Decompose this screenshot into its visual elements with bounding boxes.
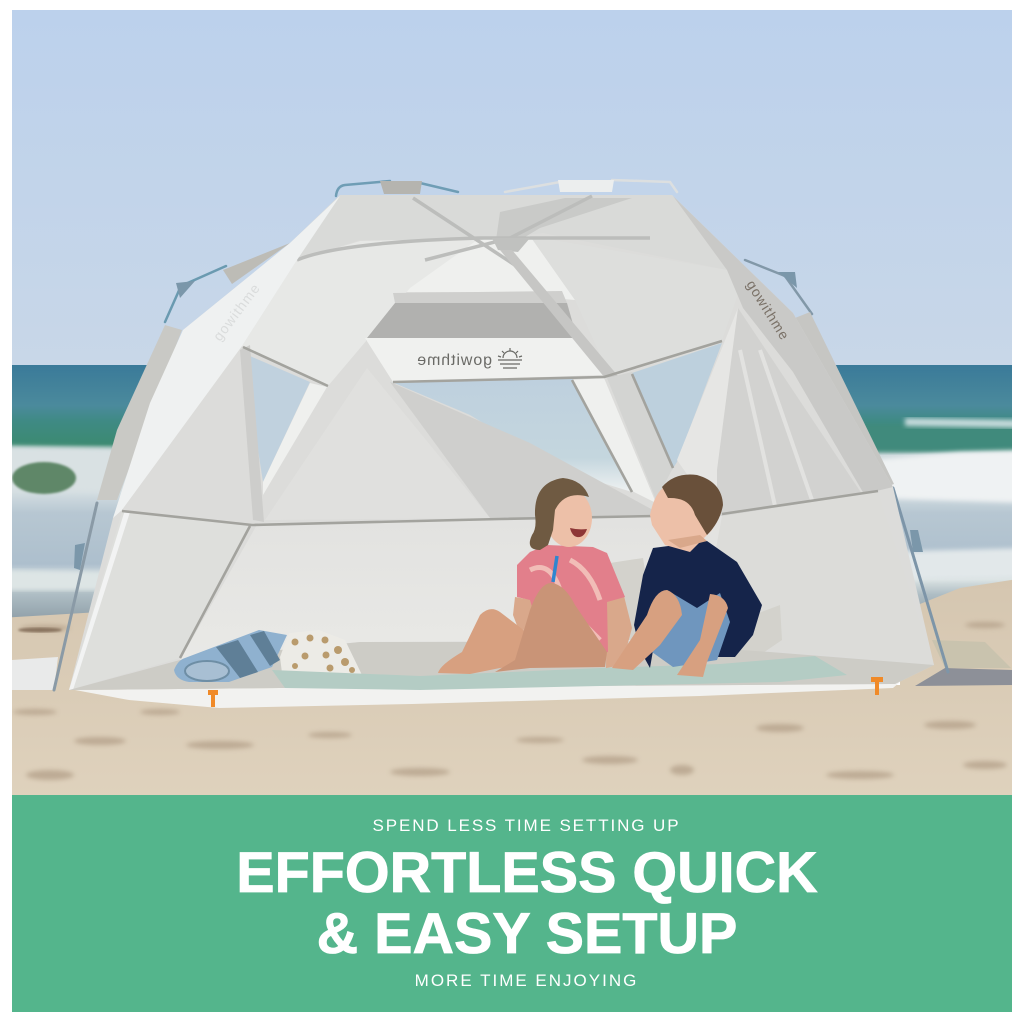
center triangle <box>265 368 490 520</box>
tent silhouette base <box>69 195 934 690</box>
left side panel <box>122 347 264 520</box>
girl zipper <box>553 556 557 582</box>
upper white area behind straps <box>400 236 575 300</box>
roof fabric tabs <box>380 181 422 194</box>
beach blanket <box>272 656 847 690</box>
girl mouth <box>570 528 587 537</box>
boy torso and sleeves <box>634 541 762 668</box>
white left strip <box>263 383 327 495</box>
pole clamps <box>74 272 923 570</box>
right strip <box>673 196 893 494</box>
mirrored brand text: gowithme <box>416 352 492 369</box>
sea <box>12 365 1012 625</box>
girl near leg <box>495 583 607 672</box>
waves <box>0 418 1024 590</box>
left window <box>243 353 310 482</box>
center right panel <box>390 382 655 518</box>
boy hair <box>662 474 723 535</box>
green banner <box>12 795 1012 1012</box>
mesh vent <box>367 291 577 338</box>
back right flap <box>795 312 894 490</box>
right window <box>632 343 722 470</box>
banner subheading: SPEND LESS TIME SETTING UP <box>373 816 680 835</box>
seaweed patches <box>18 628 62 632</box>
back left flap <box>97 243 290 500</box>
sand footprints <box>13 622 1007 780</box>
girl head <box>546 489 592 547</box>
strip brand text: gowithme <box>743 277 793 343</box>
banner title <box>236 841 818 966</box>
sand <box>0 577 1024 800</box>
top roof panel <box>297 195 727 270</box>
beach photo background <box>0 10 1024 800</box>
pillow behind children <box>610 558 782 655</box>
front pillar <box>572 372 673 503</box>
ground sheet <box>12 640 1012 708</box>
left roof strip: gowithme <box>210 280 263 344</box>
roof strap shadows <box>297 196 650 275</box>
left roof panel <box>242 238 480 386</box>
orange tent pegs <box>208 677 883 707</box>
folded striped towel <box>174 630 287 682</box>
boy shorts <box>652 590 730 667</box>
banner title: EFFORTLESS QUICK <box>236 841 818 905</box>
banner title: & EASY SETUP <box>317 902 737 966</box>
girl swimsuit <box>517 545 625 665</box>
girl <box>438 478 632 674</box>
back right sheet <box>932 640 1011 668</box>
boy <box>612 474 762 677</box>
sky <box>12 10 1012 366</box>
tent <box>54 180 948 690</box>
center window <box>392 378 632 492</box>
logo <box>416 348 522 369</box>
boy legs <box>612 590 728 677</box>
right curtain <box>677 308 862 517</box>
inner left wedge <box>263 340 367 510</box>
seam lines <box>122 341 878 658</box>
tent floor <box>69 642 934 690</box>
girl far leg <box>438 609 552 674</box>
sun icon <box>498 348 522 368</box>
tent poles <box>54 180 948 690</box>
right lower wall <box>712 492 934 665</box>
diagonal band right of vent <box>500 250 618 378</box>
right roof panel <box>530 236 738 376</box>
back lower wall <box>180 516 780 660</box>
left lower wall <box>69 512 250 690</box>
boy neck <box>668 535 707 548</box>
banner footer line: MORE TIME ENJOYING <box>415 971 638 990</box>
girl arms <box>513 596 632 668</box>
left roof strip <box>113 196 340 518</box>
boy head <box>650 485 712 552</box>
patterned towel roll <box>280 630 362 675</box>
girl hair <box>530 478 589 550</box>
logo panel <box>365 338 604 382</box>
